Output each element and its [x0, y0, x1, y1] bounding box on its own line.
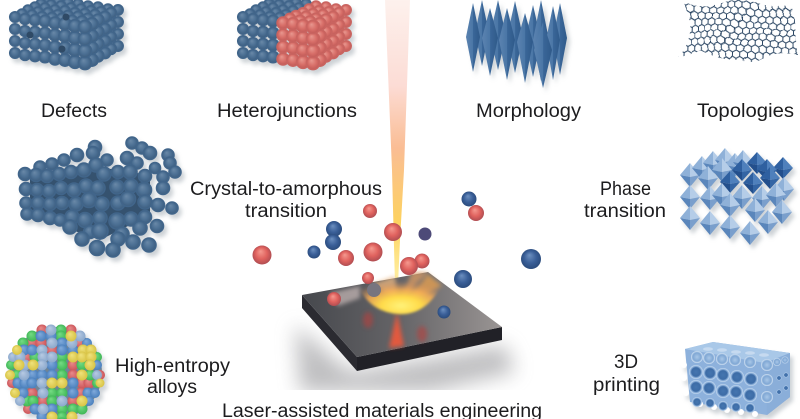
reflected beam	[389, 312, 404, 348]
label: Heterojunctions: Heterojunctions	[217, 101, 357, 122]
label: 3D printing: printing	[593, 375, 660, 396]
panel: morphology spindles	[466, 0, 567, 88]
melt pool glow	[358, 276, 444, 314]
label: Crystal-to-amorphous transition	[190, 179, 382, 222]
panel: high-entropy alloy nanoparticle	[5, 324, 105, 419]
laser beam	[385, 0, 410, 285]
material plate with melt pool	[302, 272, 502, 371]
label: Phase transition: transition	[584, 201, 666, 222]
panel: 3D printed lattice block	[681, 342, 790, 417]
label: 3D printing	[593, 352, 660, 396]
label: High-entropy alloys: alloys	[147, 377, 197, 398]
panel: crystal-to-amorphous cluster	[18, 137, 181, 257]
label: Morphology: Morphology	[476, 101, 582, 122]
label: High-entropy alloys	[115, 356, 231, 398]
panel: topology honeycomb sheet	[677, 0, 797, 62]
label: Defects: Defects	[41, 101, 107, 122]
panel: phase transition octahedra	[680, 148, 794, 245]
label: Crystal-to-amorphous transition: Crystal-to-amorphous	[190, 179, 382, 200]
label: Topologies: Topologies	[697, 101, 794, 122]
reflected spheres	[363, 312, 427, 342]
panel: heterojunction lattice	[238, 0, 351, 70]
label: 3D printing: 3D	[614, 352, 638, 373]
ejection rays	[372, 272, 442, 305]
ejected particles	[252, 192, 541, 318]
particle trail	[330, 286, 360, 306]
plate ground shadow	[295, 325, 515, 392]
panel: defects crystal lattice	[10, 0, 123, 70]
label: Phase transition: Phase	[600, 179, 651, 200]
label: Crystal-to-amorphous transition: transition	[245, 201, 327, 222]
label: Phase transition	[584, 179, 666, 222]
label: High-entropy alloys: High-entropy	[115, 356, 231, 377]
